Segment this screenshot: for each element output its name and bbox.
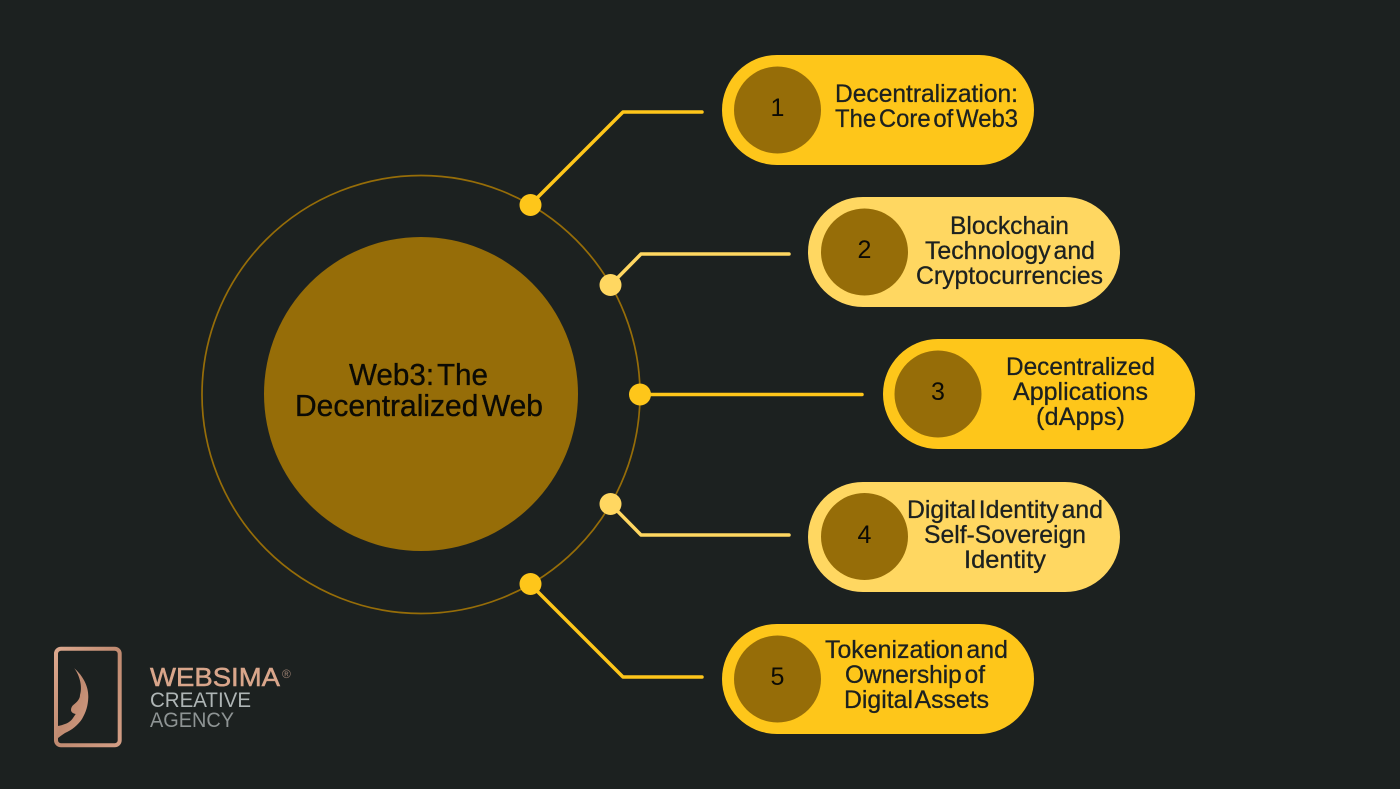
logo wordmark [150,662,291,732]
pill 2: Blockchain: Technology and [925,237,1095,265]
pill 4: Digital Identity: Digital Identity and [907,496,1103,524]
pill 4: Digital Identity: Self-Sovereign [924,521,1086,549]
central circle with title [264,237,578,551]
connector 2 [600,254,789,296]
logo icon [56,649,120,745]
logo wordmark: WEBSIMA [150,662,281,692]
pill 5: Tokenization: Tokenization and [825,636,1008,664]
pill 5: Tokenization [722,624,1034,734]
pill 1: Decentralization: The Core of Web3 [835,105,1018,133]
pill 3: dApps: 3 [931,378,945,406]
logo wordmark: CREATIVE [150,689,251,712]
pill 4: Digital Identity: 4 [858,521,872,549]
pill 5: Tokenization: 5 [771,663,784,691]
logo [56,649,291,745]
pill 4: Digital Identity [808,482,1120,592]
logo wordmark: ® [282,667,291,681]
pill 2: Blockchain: Cryptocurrencies [916,262,1103,290]
pill 5: Tokenization: Ownership of [845,661,985,689]
pill 2: Blockchain: Blockchain [950,212,1069,240]
pill 3: dApps: Applications [1013,378,1148,406]
pill 1: Decentralization: Decentralization: [835,80,1018,108]
title [295,357,543,423]
pill 2: Blockchain [808,197,1120,307]
pill 5: Tokenization: Digital Assets [844,686,989,714]
pill 2: Blockchain: 2 [858,236,871,264]
pill 1: Decentralization: 1 [771,94,784,122]
pill 4: Digital Identity: Identity [964,546,1047,574]
pill 3: dApps [883,339,1195,449]
connector 5 [520,573,702,677]
pill 1: Decentralization [722,55,1034,165]
pill 3: dApps: Decentralized [1006,353,1155,381]
title: Decentralized Web [295,388,543,423]
title: Web3: The [349,357,488,392]
pill 3: dApps: (dApps) [1036,403,1125,431]
connector 3 [629,384,862,406]
connector 1 [520,112,702,216]
logo wordmark: AGENCY [150,709,234,732]
outer ring [202,176,640,614]
connector 4 [600,493,789,535]
